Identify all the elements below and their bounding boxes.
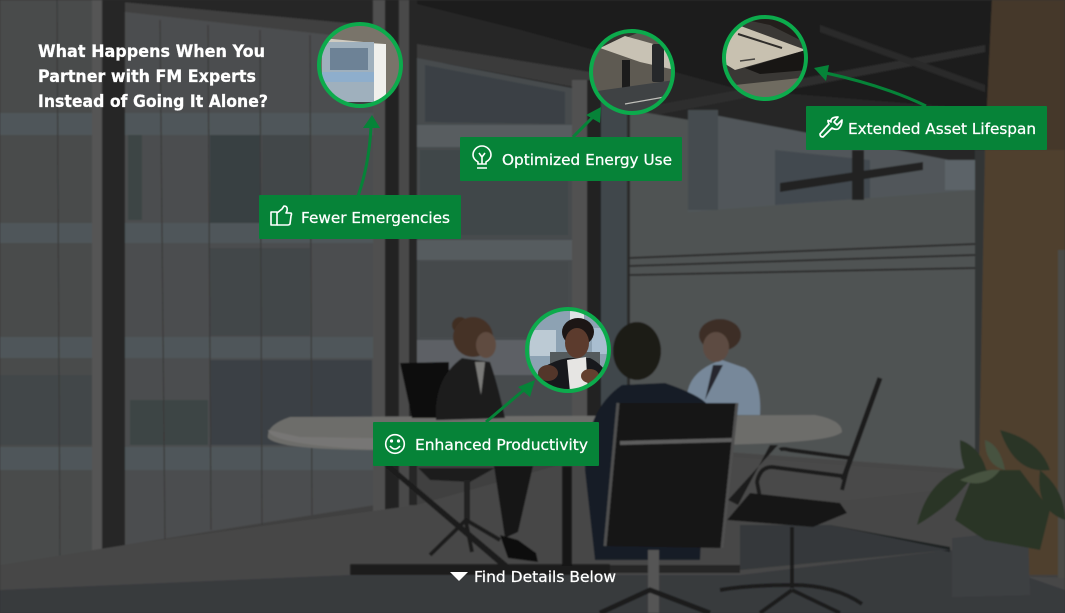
icon: thumbs up xyxy=(271,206,292,225)
icon: light bulb xyxy=(473,146,491,168)
table xyxy=(268,415,842,450)
spotlight: smiling colleague xyxy=(525,308,616,395)
centre man xyxy=(585,383,708,560)
plant xyxy=(917,430,1065,597)
foreground chair xyxy=(605,403,737,548)
wood wall xyxy=(977,0,1065,575)
label: extended asset lifespan xyxy=(806,106,1047,150)
call to action: find details below: Find Details Below xyxy=(474,568,616,586)
spotlight: window xyxy=(317,22,403,108)
floor xyxy=(0,445,1065,613)
spotlight: ceiling asset unit xyxy=(722,15,808,101)
label: optimized energy use: Optimized Energy Use xyxy=(502,151,672,169)
label: enhanced productivity xyxy=(373,422,599,466)
arrow: fewer emergencies xyxy=(358,115,380,196)
arrow: extended asset lifespan xyxy=(814,65,926,106)
left woman xyxy=(400,362,449,418)
ceiling xyxy=(90,0,1000,170)
arrow: enhanced productivity xyxy=(486,380,535,422)
label: fewer emergencies xyxy=(259,195,461,239)
glass wall xyxy=(630,110,985,475)
spotlight: ceiling energy unit xyxy=(590,30,675,115)
title: Partner with FM Experts xyxy=(38,67,256,87)
mullions xyxy=(373,0,385,515)
label: extended asset lifespan: Extended Asset Lifespan xyxy=(848,120,1036,138)
icon: smiley xyxy=(386,435,404,453)
centre window xyxy=(417,58,572,440)
title: Instead of Going It Alone? xyxy=(38,92,268,112)
arrow: optimized energy use xyxy=(573,107,601,137)
label: enhanced productivity: Enhanced Productivity xyxy=(415,436,588,454)
right chair xyxy=(720,378,880,613)
label: optimized energy use xyxy=(460,137,682,181)
window reflection bands xyxy=(0,113,375,470)
left window xyxy=(0,0,100,565)
icon: wrench xyxy=(820,117,842,137)
label: fewer emergencies: Fewer Emergencies xyxy=(301,209,450,227)
title: What Happens When You xyxy=(38,42,265,62)
right man xyxy=(687,360,760,415)
title xyxy=(38,42,268,112)
